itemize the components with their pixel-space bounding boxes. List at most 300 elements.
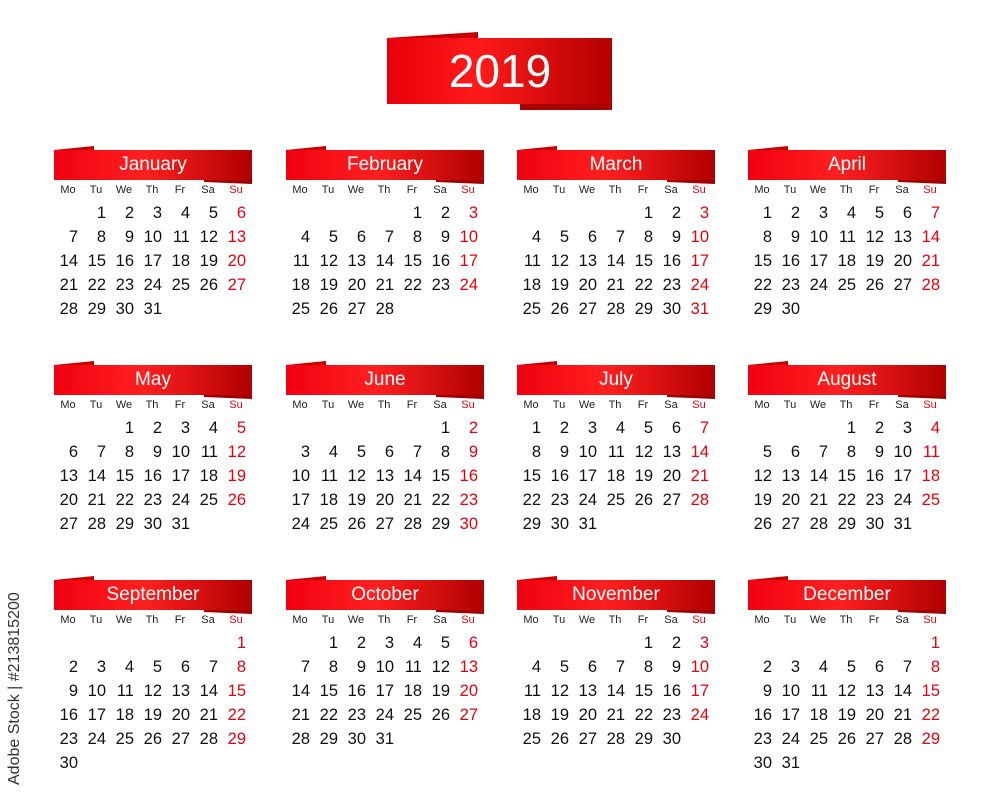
month: November: 5 xyxy=(560,658,569,676)
month: July: Sa xyxy=(664,399,678,411)
month: June: 8 xyxy=(441,443,450,461)
month: December: 7 xyxy=(903,658,912,676)
month: October: We xyxy=(348,614,364,626)
month: July: 29 xyxy=(523,515,541,533)
month: February: 24 xyxy=(460,276,478,294)
month: December xyxy=(748,576,946,772)
month: October: 17 xyxy=(376,682,394,700)
month: July: Th xyxy=(609,399,621,411)
month: October: 13 xyxy=(460,658,478,676)
month: October: 1 xyxy=(329,634,338,652)
month: November: 1 xyxy=(644,634,653,652)
month: April: Sa xyxy=(895,184,909,196)
month: August: 17 xyxy=(894,467,912,485)
month: August: 13 xyxy=(782,467,800,485)
month: February: Sa xyxy=(433,184,447,196)
month: April: 29 xyxy=(754,300,772,318)
month: November: 3 xyxy=(700,634,709,652)
month: January: 25 xyxy=(172,276,190,294)
month: August: 8 xyxy=(847,443,856,461)
month: June: 12 xyxy=(348,467,366,485)
month: June: 1 xyxy=(441,419,450,437)
month: December: 14 xyxy=(894,682,912,700)
month: January: 19 xyxy=(200,252,218,270)
month: March: 22 xyxy=(635,276,653,294)
month: September: 24 xyxy=(88,730,106,748)
month: June: 22 xyxy=(432,491,450,509)
month: December: 31 xyxy=(782,754,800,772)
month: October: October xyxy=(351,584,419,605)
month: February: 5 xyxy=(329,228,338,246)
month: June: 14 xyxy=(404,467,422,485)
month: November: 29 xyxy=(635,730,653,748)
month: July: 19 xyxy=(635,467,653,485)
month: October: Mo xyxy=(292,614,308,626)
month: July: 25 xyxy=(607,491,625,509)
month: September: 5 xyxy=(153,658,162,676)
month: November: Th xyxy=(609,614,621,626)
month: October: 31 xyxy=(376,730,394,748)
month: May: 19 xyxy=(228,467,246,485)
month: December: 21 xyxy=(894,706,912,724)
month: July: 7 xyxy=(700,419,709,437)
month: August: 6 xyxy=(791,443,800,461)
month: September: 12 xyxy=(144,682,162,700)
month: February: 8 xyxy=(413,228,422,246)
month: March: 24 xyxy=(691,276,709,294)
month: September: Mo xyxy=(60,614,76,626)
month: January: 16 xyxy=(116,252,134,270)
month: March: 7 xyxy=(616,228,625,246)
month: October: 24 xyxy=(376,706,394,724)
month: December: 13 xyxy=(866,682,884,700)
month: March: 26 xyxy=(551,300,569,318)
month: September: 22 xyxy=(228,706,246,724)
month: October: Su xyxy=(461,614,475,626)
month: February: 16 xyxy=(432,252,450,270)
month: July: 12 xyxy=(635,443,653,461)
month: December: 16 xyxy=(754,706,772,724)
month: December: 26 xyxy=(838,730,856,748)
month: June: Tu xyxy=(322,399,334,411)
month: April: 6 xyxy=(903,204,912,222)
month: March: 21 xyxy=(607,276,625,294)
month: November: November xyxy=(572,584,660,605)
month: May: 8 xyxy=(125,443,134,461)
month: January: 9 xyxy=(125,228,134,246)
month: December: 11 xyxy=(811,682,828,700)
month: August: 28 xyxy=(810,515,828,533)
month: February: 4 xyxy=(301,228,310,246)
month: January: 4 xyxy=(181,204,190,222)
month: February: 3 xyxy=(469,204,478,222)
month: December: 6 xyxy=(875,658,884,676)
month: May: 29 xyxy=(116,515,134,533)
month: August: 24 xyxy=(894,491,912,509)
month: June xyxy=(286,361,484,533)
month: September: 16 xyxy=(60,706,78,724)
month: July: 15 xyxy=(523,467,541,485)
month: November: 11 xyxy=(524,682,541,700)
month: January: 15 xyxy=(88,252,106,270)
month: August: Mo xyxy=(754,399,770,411)
month: May: 16 xyxy=(144,467,162,485)
month: March: We xyxy=(579,184,595,196)
month: May: 27 xyxy=(60,515,78,533)
month: July: 24 xyxy=(579,491,597,509)
month: January: 26 xyxy=(200,276,218,294)
month: September: 8 xyxy=(237,658,246,676)
month: December: 8 xyxy=(931,658,940,676)
month: January: 28 xyxy=(60,300,78,318)
month: October: 28 xyxy=(292,730,310,748)
month: July: Fr xyxy=(638,399,648,411)
month: June: Sa xyxy=(433,399,447,411)
month: April: 9 xyxy=(791,228,800,246)
month: April: 15 xyxy=(754,252,772,270)
month: October xyxy=(286,576,484,748)
month: August: 19 xyxy=(754,491,772,509)
month: December: 28 xyxy=(894,730,912,748)
month: August: Su xyxy=(923,399,937,411)
year ribbon: 2019 xyxy=(449,45,551,97)
month: June: 4 xyxy=(329,443,338,461)
month: February: February xyxy=(347,154,423,175)
month: August: 18 xyxy=(922,467,940,485)
month: December: 19 xyxy=(838,706,856,724)
month: July: 1 xyxy=(532,419,541,437)
month: September: September xyxy=(107,584,199,605)
month: November: 18 xyxy=(523,706,541,724)
month: August: 23 xyxy=(866,491,884,509)
month: April: 3 xyxy=(819,204,828,222)
month: September: 20 xyxy=(172,706,190,724)
month: June: 11 xyxy=(321,467,338,485)
month: August: 14 xyxy=(810,467,828,485)
month: November: Tu xyxy=(553,614,565,626)
month: December: 29 xyxy=(922,730,940,748)
month: November: 14 xyxy=(607,682,625,700)
month: December: Tu xyxy=(784,614,796,626)
month: July: 21 xyxy=(691,467,709,485)
month: February: Th xyxy=(378,184,390,196)
month: December: Su xyxy=(923,614,937,626)
month: December: 23 xyxy=(754,730,772,748)
month: April: 2 xyxy=(791,204,800,222)
month: February: 2 xyxy=(441,204,450,222)
month: May: We xyxy=(116,399,132,411)
month: September: 11 xyxy=(117,682,134,700)
month: August: 9 xyxy=(875,443,884,461)
month: April: Tu xyxy=(784,184,796,196)
month: January: 29 xyxy=(88,300,106,318)
month: July: 2 xyxy=(560,419,569,437)
month: May: 10 xyxy=(172,443,190,461)
month: January: 7 xyxy=(69,228,78,246)
month: August: 4 xyxy=(931,419,940,437)
month: December: Th xyxy=(840,614,852,626)
month: October: 4 xyxy=(413,634,422,652)
month: January: 3 xyxy=(153,204,162,222)
month: June: We xyxy=(348,399,364,411)
month: October: Sa xyxy=(433,614,447,626)
month: November: 8 xyxy=(644,658,653,676)
month: November: 26 xyxy=(551,730,569,748)
month: May: Su xyxy=(229,399,243,411)
month: February: We xyxy=(348,184,364,196)
month: May: 11 xyxy=(201,443,218,461)
month: July: 3 xyxy=(588,419,597,437)
month: December: Fr xyxy=(869,614,879,626)
month: September: 13 xyxy=(172,682,190,700)
month: December: 9 xyxy=(763,682,772,700)
month: October: 23 xyxy=(348,706,366,724)
month: March: Sa xyxy=(664,184,678,196)
month: September: 19 xyxy=(144,706,162,724)
month: May: Tu xyxy=(90,399,102,411)
month: March: 30 xyxy=(663,300,681,318)
month: June: 18 xyxy=(320,491,338,509)
month: September: 27 xyxy=(172,730,190,748)
month: August: Tu xyxy=(784,399,796,411)
month: March: 16 xyxy=(663,252,681,270)
month: January: 30 xyxy=(116,300,134,318)
month: February: Fr xyxy=(407,184,417,196)
month: October: Tu xyxy=(322,614,334,626)
month: March: 11 xyxy=(524,252,541,270)
month: February: 25 xyxy=(292,300,310,318)
month: October: Fr xyxy=(407,614,417,626)
month: January: 14 xyxy=(60,252,78,270)
month: June: 13 xyxy=(376,467,394,485)
month: June: 15 xyxy=(432,467,450,485)
month: March: 20 xyxy=(579,276,597,294)
month: March: Fr xyxy=(638,184,648,196)
month: May: 2 xyxy=(153,419,162,437)
month: December: 1 xyxy=(931,634,940,652)
month: January: 22 xyxy=(88,276,106,294)
month: December: 25 xyxy=(810,730,828,748)
month: August: 12 xyxy=(754,467,772,485)
month: July: July xyxy=(599,369,633,390)
month: December: Sa xyxy=(895,614,909,626)
month: November: Sa xyxy=(664,614,678,626)
month: February: 12 xyxy=(320,252,338,270)
month: February xyxy=(286,146,484,318)
month: June: Th xyxy=(378,399,390,411)
month: July: 9 xyxy=(560,443,569,461)
month: February: 10 xyxy=(460,228,478,246)
month: April: 28 xyxy=(922,276,940,294)
month: January: January xyxy=(119,154,187,175)
month: March: 12 xyxy=(551,252,569,270)
month: January: 10 xyxy=(144,228,162,246)
month: January: 1 xyxy=(97,204,106,222)
month: July: 14 xyxy=(691,443,709,461)
month: October: 25 xyxy=(404,706,422,724)
month: October: 22 xyxy=(320,706,338,724)
month: May: 18 xyxy=(200,467,218,485)
month: October: 26 xyxy=(432,706,450,724)
month: December: 22 xyxy=(922,706,940,724)
month: October: 12 xyxy=(432,658,450,676)
month: May: 24 xyxy=(172,491,190,509)
month: May: 13 xyxy=(60,467,78,485)
month: April: 23 xyxy=(782,276,800,294)
month: January: 20 xyxy=(228,252,246,270)
month: September: Tu xyxy=(90,614,102,626)
month: July: 6 xyxy=(672,419,681,437)
month: December: December xyxy=(803,584,891,605)
month: February: 6 xyxy=(357,228,366,246)
month: June: 25 xyxy=(320,515,338,533)
month: April: Mo xyxy=(754,184,770,196)
month: January: 18 xyxy=(172,252,190,270)
month: May: 30 xyxy=(144,515,162,533)
month: September: 26 xyxy=(144,730,162,748)
month: August: 16 xyxy=(866,467,884,485)
month: August: 20 xyxy=(782,491,800,509)
month: January: 17 xyxy=(144,252,162,270)
month: April: 22 xyxy=(754,276,772,294)
month: October: 8 xyxy=(329,658,338,676)
month: February: 23 xyxy=(432,276,450,294)
month: March: 23 xyxy=(663,276,681,294)
month: September: 15 xyxy=(228,682,246,700)
month: May: Sa xyxy=(201,399,215,411)
month: January: Su xyxy=(229,184,243,196)
month: September: 17 xyxy=(88,706,106,724)
month: September: 14 xyxy=(200,682,218,700)
month: August: 3 xyxy=(903,419,912,437)
month: November: 12 xyxy=(551,682,569,700)
month: October: 19 xyxy=(432,682,450,700)
month: March: 31 xyxy=(691,300,709,318)
month: March: 25 xyxy=(523,300,541,318)
month: May: 21 xyxy=(88,491,106,509)
month: April: 14 xyxy=(922,228,940,246)
month: January: Tu xyxy=(90,184,102,196)
month: February: 14 xyxy=(376,252,394,270)
month: September: Sa xyxy=(201,614,215,626)
month: October: 9 xyxy=(357,658,366,676)
month: April: 30 xyxy=(782,300,800,318)
month: June: 10 xyxy=(292,467,310,485)
month: September: 10 xyxy=(88,682,106,700)
month: November: 10 xyxy=(691,658,709,676)
month: March: 3 xyxy=(700,204,709,222)
month: July xyxy=(517,361,715,533)
month: October: 11 xyxy=(405,658,422,676)
month: February: 26 xyxy=(320,300,338,318)
month: May: 17 xyxy=(172,467,190,485)
month: February: 11 xyxy=(293,252,310,270)
month: December: 15 xyxy=(922,682,940,700)
month: March: 13 xyxy=(579,252,597,270)
month: September: 2 xyxy=(69,658,78,676)
month: March: Th xyxy=(609,184,621,196)
month: March: 8 xyxy=(644,228,653,246)
side credit text: Adobe Stock | #213815200 xyxy=(6,592,23,785)
month: August: 21 xyxy=(810,491,828,509)
month: June: Fr xyxy=(407,399,417,411)
month: July: Mo xyxy=(523,399,539,411)
month: April: 19 xyxy=(866,252,884,270)
month: January xyxy=(54,146,252,318)
month: October: 10 xyxy=(376,658,394,676)
month: August: 1 xyxy=(847,419,856,437)
month: November: 15 xyxy=(635,682,653,700)
month: May: 26 xyxy=(228,491,246,509)
month: July: 20 xyxy=(663,467,681,485)
month: February: 7 xyxy=(385,228,394,246)
month: August: 27 xyxy=(782,515,800,533)
month: June: 30 xyxy=(460,515,478,533)
month: February: Mo xyxy=(292,184,308,196)
month: October: Th xyxy=(378,614,390,626)
month: June: 16 xyxy=(460,467,478,485)
month: January: 6 xyxy=(237,204,246,222)
month: May: 3 xyxy=(181,419,190,437)
month: December: 17 xyxy=(782,706,800,724)
month: November xyxy=(517,576,715,748)
month: September xyxy=(54,576,252,772)
month: June: 21 xyxy=(404,491,422,509)
month: February: 19 xyxy=(320,276,338,294)
month: January: Sa xyxy=(201,184,215,196)
month: June: 24 xyxy=(292,515,310,533)
month: February: Su xyxy=(461,184,475,196)
month: June: 6 xyxy=(385,443,394,461)
month: November: 17 xyxy=(691,682,709,700)
month: March: 18 xyxy=(523,276,541,294)
month: April: 4 xyxy=(847,204,856,222)
month: November: 9 xyxy=(672,658,681,676)
month: September: We xyxy=(116,614,132,626)
month: September: 6 xyxy=(181,658,190,676)
month: July: 10 xyxy=(579,443,597,461)
month: August: 26 xyxy=(754,515,772,533)
month: April: 13 xyxy=(894,228,912,246)
month: December: 30 xyxy=(754,754,772,772)
month: April: 17 xyxy=(810,252,828,270)
month: November: 25 xyxy=(523,730,541,748)
month: February: 13 xyxy=(348,252,366,270)
month: June: 29 xyxy=(432,515,450,533)
month: July: 26 xyxy=(635,491,653,509)
month: April: 25 xyxy=(838,276,856,294)
month: October: 7 xyxy=(301,658,310,676)
month: July: Su xyxy=(692,399,706,411)
month: February: 15 xyxy=(404,252,422,270)
month: June: Su xyxy=(461,399,475,411)
month: September: 9 xyxy=(69,682,78,700)
month: November: 27 xyxy=(579,730,597,748)
month: March: 6 xyxy=(588,228,597,246)
month: February: 9 xyxy=(441,228,450,246)
year ribbon xyxy=(387,32,612,110)
month: October: 30 xyxy=(348,730,366,748)
month: March: 9 xyxy=(672,228,681,246)
month: February: 28 xyxy=(376,300,394,318)
month: November: 16 xyxy=(663,682,681,700)
month: October: 2 xyxy=(357,634,366,652)
month: April: Su xyxy=(923,184,937,196)
month: April: 10 xyxy=(810,228,828,246)
month: January: 21 xyxy=(60,276,78,294)
month: September: Fr xyxy=(175,614,185,626)
month: December: 24 xyxy=(782,730,800,748)
